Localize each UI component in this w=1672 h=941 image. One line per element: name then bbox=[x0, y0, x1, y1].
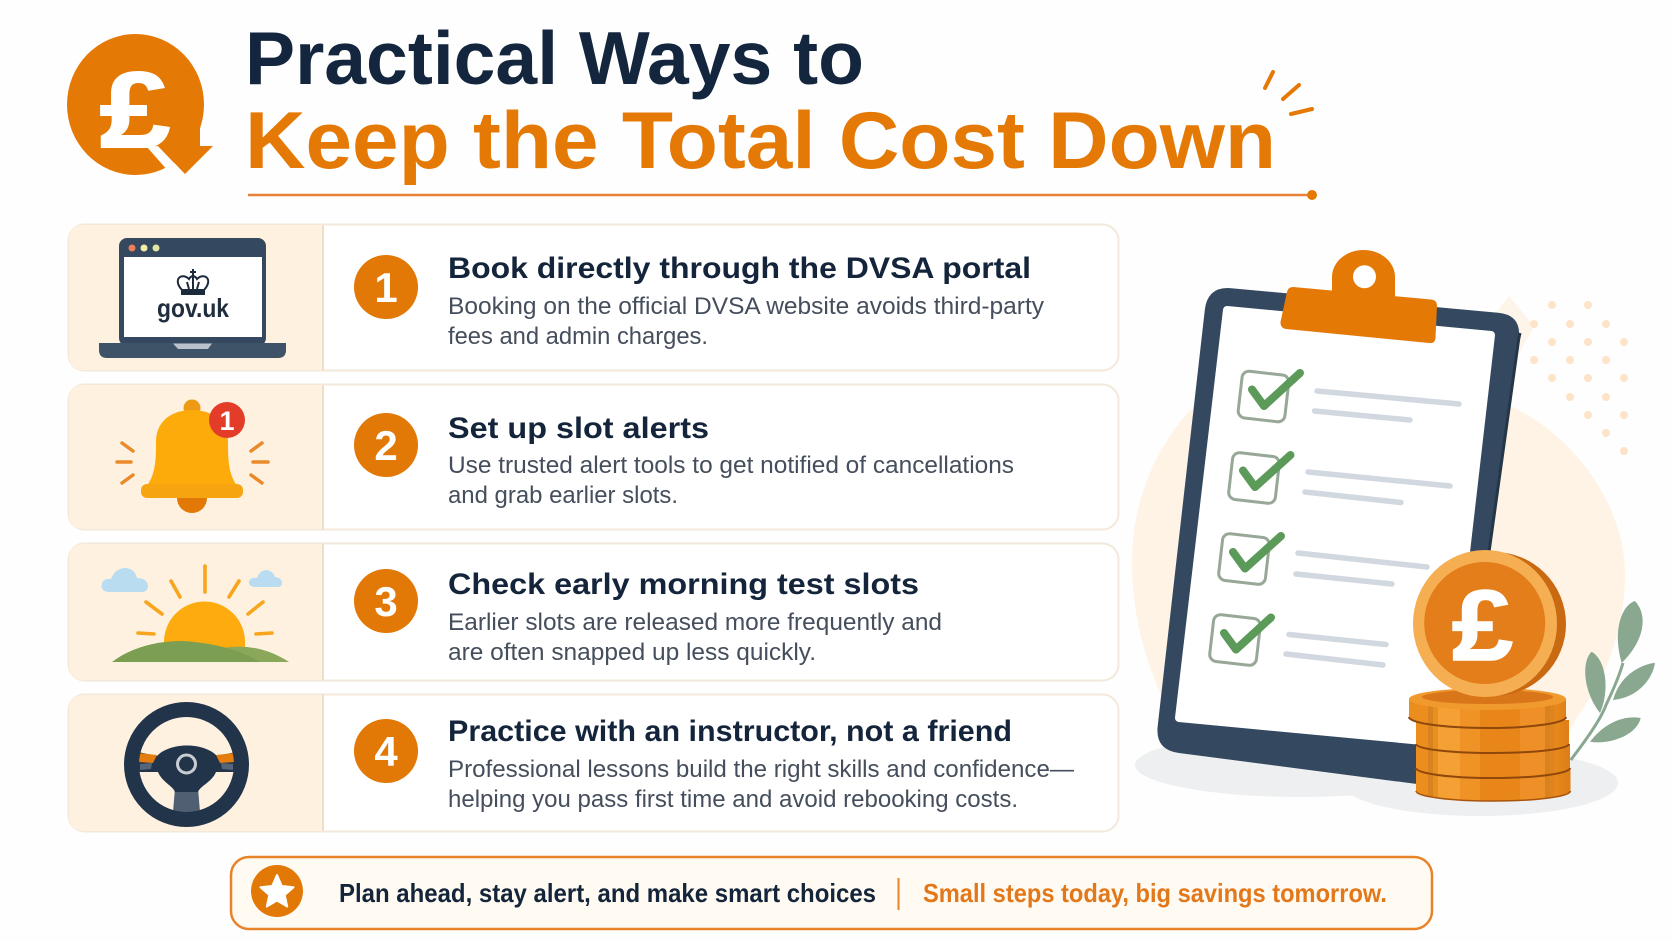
number badge 2: 2 bbox=[374, 422, 398, 469]
panel: step 4 bbox=[68, 694, 1118, 832]
checklist item 1 bbox=[1237, 370, 1459, 423]
icon: sparkle marks bbox=[1265, 72, 1312, 114]
background blob bbox=[1132, 407, 1625, 790]
banner text right: Small steps today, big savings tomorrow. bbox=[923, 878, 1387, 908]
checklist item 3 bbox=[1218, 533, 1427, 585]
number badge 4: 4 bbox=[374, 728, 398, 775]
big pound coin bbox=[1413, 550, 1566, 697]
panel: step 1 bbox=[68, 224, 1118, 370]
body: step 4 bbox=[448, 756, 1074, 813]
icon: sunrise over hills bbox=[102, 566, 289, 662]
body: step 1: Booking on the official DVSA website avoids third-party bbox=[448, 293, 1044, 320]
body: step 4: helping you pass first time and avoid rebooking costs. bbox=[448, 786, 1018, 813]
panel: step 2 bbox=[68, 384, 1118, 530]
number badge 3 bbox=[354, 569, 418, 633]
coin stack bbox=[1409, 688, 1570, 801]
heading: step 1: Book directly through the DVSA portal bbox=[448, 252, 1031, 285]
icon: pound with down arrow: £ bbox=[100, 49, 170, 170]
body: step 3 bbox=[448, 609, 942, 666]
number badge 2 bbox=[354, 413, 418, 477]
body: step 2 bbox=[448, 452, 1014, 509]
title: Keep the Total Cost Down bbox=[245, 96, 1276, 186]
clipboard paper bbox=[1179, 310, 1491, 743]
heading: step 4: Practice with an instructor, not a friend bbox=[448, 715, 1012, 748]
icon: laptop gov.uk: gov.uk bbox=[157, 293, 229, 323]
body: step 1: fees and admin charges. bbox=[448, 323, 708, 350]
plant bbox=[1571, 601, 1655, 760]
number badge 1 bbox=[354, 255, 418, 319]
banner text left: Plan ahead, stay alert, and make smart choices bbox=[339, 878, 876, 908]
heading: step 3: Check early morning test slots bbox=[448, 568, 919, 601]
icon: pound with down arrow bbox=[67, 34, 213, 175]
ground shadow bbox=[1135, 733, 1618, 816]
panel: step 3 bbox=[68, 544, 1118, 680]
checklist item 2 bbox=[1228, 452, 1450, 504]
decorative dots bbox=[1490, 296, 1628, 455]
title: Practical Ways to bbox=[245, 16, 864, 100]
body: step 4: Professional lessons build the right skills and confidence— bbox=[448, 756, 1074, 783]
icon: laptop gov.uk bbox=[99, 238, 286, 358]
callout banner bbox=[231, 857, 1432, 929]
title underline bbox=[248, 190, 1317, 200]
icon: notification bell bbox=[117, 400, 268, 513]
body: step 3: Earlier slots are released more frequently and bbox=[448, 609, 942, 636]
icon: notification bell: 1 bbox=[219, 406, 235, 436]
body: step 2: and grab earlier slots. bbox=[448, 482, 678, 509]
body: step 3: are often snapped up less quickly. bbox=[448, 639, 816, 666]
clipboard clip bbox=[1280, 250, 1437, 343]
icon: steering wheel bbox=[132, 710, 242, 820]
icon: star badge bbox=[251, 865, 303, 917]
number badge 4 bbox=[354, 719, 418, 783]
number badge 3: 3 bbox=[374, 578, 398, 625]
body: step 1 bbox=[448, 293, 1044, 350]
illustration: clipboard with coins bbox=[1132, 250, 1655, 816]
heading: step 2: Set up slot alerts bbox=[448, 412, 709, 445]
clipboard board bbox=[1157, 288, 1520, 786]
body: step 2: Use trusted alert tools to get notified of cancellations bbox=[448, 452, 1014, 479]
checklist item 4 bbox=[1209, 614, 1386, 666]
number badge 1: 1 bbox=[374, 264, 398, 311]
title bbox=[245, 16, 1276, 186]
big pound coin: £ bbox=[1452, 570, 1513, 682]
